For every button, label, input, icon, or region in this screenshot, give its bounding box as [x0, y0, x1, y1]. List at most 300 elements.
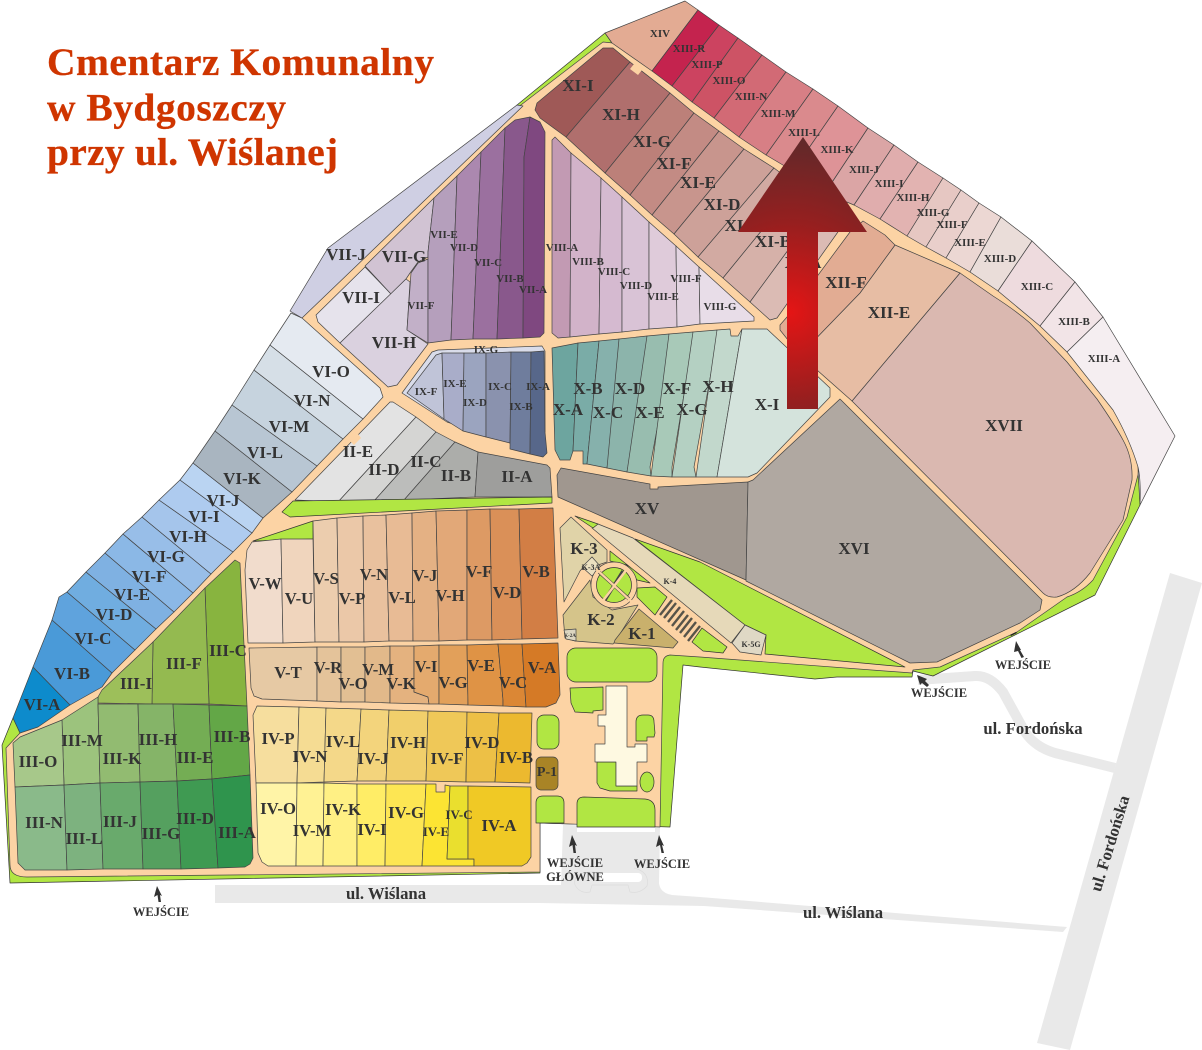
plot XI-F	[630, 113, 719, 215]
labels: section IV: IV-O	[260, 799, 296, 818]
labels: section XI: XI-E	[680, 173, 716, 192]
labels: section VIII: VIII-D	[620, 280, 652, 292]
section XVI: XVI	[838, 539, 870, 558]
plot X-C	[587, 339, 622, 468]
labels: section III: III-N	[25, 813, 64, 832]
plot VI-C	[52, 592, 135, 673]
plot VII-H	[340, 279, 428, 387]
plot X-E	[627, 334, 673, 476]
labels: section IX: IX-E	[443, 378, 467, 390]
labels: section IV: IV-N	[293, 747, 327, 766]
labels: K area: K-3	[570, 539, 598, 558]
plot P-1: P-1	[537, 765, 557, 780]
section IV	[253, 706, 533, 866]
plot IX-D	[463, 353, 486, 437]
labels: section XI: XI-A	[785, 253, 822, 272]
label: entrance east 2: WEJŚCIE	[911, 686, 967, 700]
labels: section V: V-E	[467, 656, 495, 675]
plot VI-O	[270, 313, 383, 419]
green lawn above P-1	[537, 715, 559, 749]
labels: section VIII: VIII-C	[598, 266, 630, 278]
roundabout	[591, 562, 637, 608]
labels: section III: III-C	[209, 641, 247, 660]
labels: section XIII	[673, 43, 1120, 365]
plot XIII-G	[907, 178, 961, 247]
labels: section III: III-J	[103, 812, 138, 831]
plot XIII-J	[825, 128, 894, 205]
labels: section V: V-C	[499, 673, 527, 692]
labels: section V: V-M	[362, 660, 394, 679]
labels: section IV: IV-E	[423, 824, 449, 839]
plot II-B	[404, 442, 478, 500]
plot V-K	[390, 646, 429, 704]
section X	[552, 329, 830, 477]
labels: section XIII: XIII-N	[735, 91, 767, 103]
label: entrance south-west: WEJŚCIE	[133, 905, 189, 919]
labels: section X: X-C	[593, 403, 623, 422]
labels: section X: X-D	[615, 379, 645, 398]
street label: ul. Wiślana left: ul. Wiślana	[346, 884, 427, 903]
plot VI-D	[67, 572, 156, 650]
labels: section XI: XI-G	[633, 132, 671, 151]
plot IV-N	[297, 707, 326, 783]
labels: section XI: XI-B	[755, 232, 791, 251]
arrow: main entrance	[569, 835, 577, 853]
labels: section VI: VI-J	[206, 491, 240, 510]
labels: K area: K-3A	[582, 563, 601, 572]
section XI	[535, 48, 845, 320]
plot VIII-G	[699, 267, 754, 324]
labels: section VII: VII-H	[372, 333, 416, 352]
labels: section V: V-A	[528, 658, 556, 677]
labels: section X: X-G	[676, 400, 708, 419]
plot X-A	[552, 343, 578, 460]
labels: section V: V-F	[466, 562, 492, 581]
labels: section IV: IV-F	[430, 749, 464, 768]
plot K-3A	[582, 557, 601, 576]
green lawn by entrance	[577, 797, 655, 827]
plot IX-A	[530, 351, 547, 457]
labels: section IV: IV-B	[499, 748, 533, 767]
plot VI-I	[159, 480, 252, 552]
labels: section XIII: XIII-O	[712, 75, 746, 87]
green lawn below P-1	[536, 796, 564, 823]
plot IV-M	[296, 783, 324, 866]
plot IV-K	[323, 783, 357, 866]
labels: section V: V-S	[313, 569, 339, 588]
section XV: XV	[635, 499, 660, 518]
labels: section VI	[24, 362, 350, 714]
plot XI-H	[566, 62, 670, 173]
green wedge	[610, 551, 650, 583]
plot XI-A	[750, 204, 845, 320]
labels: section X: X-B	[573, 379, 603, 398]
green top triangle	[575, 516, 598, 528]
title: przy ul. Wiślanej	[47, 130, 338, 174]
section XV	[557, 468, 748, 580]
labels: section V: V-R	[314, 658, 343, 677]
plot VI-K	[193, 431, 292, 518]
plot XII-E	[800, 245, 960, 401]
plot III-C	[205, 560, 247, 706]
plot V-M	[365, 646, 390, 703]
labels: section III	[19, 641, 257, 848]
labels: section VI: VI-F	[132, 567, 166, 586]
labels: section V	[248, 562, 556, 693]
plot K-3	[560, 517, 607, 602]
green lower	[692, 628, 727, 653]
labels: section XIII: XIII-A	[1088, 353, 1120, 365]
green lawn east of chapel	[636, 715, 655, 741]
labels: section XII: XII-E	[868, 303, 910, 322]
plot XIII-O	[692, 38, 762, 118]
labels: section VIII: VIII-F	[670, 273, 702, 285]
notch in II-E	[350, 434, 361, 445]
label: main entrance: WEJŚCIE	[547, 856, 603, 870]
plot III-O	[13, 720, 64, 787]
labels: section IX: IX-C	[488, 381, 512, 393]
plot XIII-B	[1040, 282, 1103, 352]
plot XIII-M	[739, 72, 813, 155]
labels: section VI: VI-M	[269, 417, 309, 436]
title: Cmentarz Komunalny	[47, 40, 434, 84]
plot V-F	[467, 509, 492, 640]
plot III-F	[152, 588, 209, 704]
labels: section III: III-M	[61, 731, 103, 750]
labels: section VII: VII-G	[382, 247, 426, 266]
plot IX-B	[510, 352, 531, 454]
plot III-H	[138, 704, 177, 782]
labels: section XIII: XIII-G	[916, 207, 950, 219]
plot K-5G	[732, 625, 766, 655]
plot VII-B	[497, 117, 530, 339]
labels: section II: II-E	[343, 442, 373, 461]
arrow: entrance east 2	[917, 675, 929, 687]
section III	[13, 560, 257, 870]
plot VII-D	[451, 152, 481, 340]
labels: section XII	[825, 273, 910, 322]
labels: section VIII: VIII-G	[703, 301, 737, 313]
plot X-G	[672, 330, 717, 477]
labels: section IV: IV-C	[445, 807, 473, 822]
labels: section XI: XI-I	[562, 76, 594, 95]
street label: ul. Fordońska: ul. Fordońska	[983, 719, 1083, 738]
plot IV-I	[357, 784, 386, 866]
plot VI-L	[215, 405, 317, 492]
labels: section II: II-D	[368, 460, 400, 479]
faint loop outline	[575, 868, 647, 892]
labels: section V: V-U	[285, 589, 313, 608]
section K area	[560, 516, 905, 667]
plot XIII-K	[793, 106, 868, 193]
labels: section VI: VI-G	[147, 547, 185, 566]
green triangle by V-W	[253, 521, 313, 541]
labels: section IV: IV-K	[325, 800, 361, 819]
plot VIII-E	[649, 222, 677, 329]
plot XI-G	[605, 93, 694, 195]
labels: section V: V-D	[493, 583, 521, 602]
labels: section V: V-T	[274, 663, 302, 682]
plot XI-D	[674, 149, 774, 257]
plot V-O	[341, 647, 365, 702]
labels: section III: III-A	[218, 823, 257, 842]
plot II-E	[295, 402, 416, 502]
green boundary	[2, 33, 1140, 883]
plot IV-J	[357, 709, 389, 781]
plot V-W	[245, 539, 283, 643]
plot IV-A	[468, 786, 531, 866]
plot X-I	[717, 329, 830, 477]
labels: K area: K-2A	[564, 634, 576, 639]
green lawn west of chapel	[570, 687, 603, 713]
plot III-A	[212, 775, 253, 868]
labels: section V: V-N	[360, 565, 388, 584]
section IX	[402, 344, 550, 457]
labels: section III: III-F	[166, 654, 202, 673]
stairs	[660, 600, 700, 641]
plot II-D	[338, 417, 436, 502]
arrow: entrance south	[656, 835, 664, 853]
plot XIII-E	[946, 203, 1001, 272]
plot IX-C	[486, 352, 511, 443]
labels: section IV: IV-J	[357, 749, 389, 768]
labels: section II: II-C	[410, 452, 442, 471]
plot K-4	[592, 524, 745, 643]
plot XI-C	[698, 168, 798, 278]
labels: section VIII	[546, 242, 737, 313]
street label: ul. Fordońska vertical: ul. Fordońska	[1086, 793, 1134, 894]
plot XI-B	[723, 186, 822, 302]
labels: section XI: XI-C	[725, 216, 761, 235]
plot II-C	[374, 432, 455, 501]
notch in XI-H	[630, 64, 642, 75]
plot IV-C	[447, 786, 468, 859]
labels: section IV: IV-M	[293, 821, 332, 840]
plot II-A	[475, 452, 552, 497]
label: entrance east: WEJŚCIE	[995, 658, 1051, 672]
labels: section VI: VI-N	[294, 391, 331, 410]
plot IV-F	[426, 711, 467, 782]
plot VI-B	[33, 620, 112, 705]
plot V-H	[436, 510, 467, 641]
labels: section XIII: XIII-E	[954, 237, 986, 249]
plot K-2A	[564, 629, 576, 641]
labels: section V: V-O	[338, 674, 368, 693]
labels: section IV: IV-H	[390, 733, 426, 752]
plot V-S	[313, 518, 339, 642]
section VII	[316, 117, 547, 387]
labels: section V: V-L	[388, 588, 416, 607]
labels: section II: II-B	[441, 466, 471, 485]
plot V-B	[519, 508, 558, 639]
plot III-E	[173, 704, 212, 781]
plot X-B	[573, 341, 599, 464]
plot VI-H	[142, 500, 233, 574]
labels: section XIII: XIII-J	[849, 164, 879, 176]
labels: section V: V-P	[339, 589, 365, 608]
plot X-H	[696, 329, 742, 477]
labels: section X	[553, 377, 780, 422]
labels: section X: X-A	[553, 400, 584, 419]
label: main entrance	[546, 856, 604, 884]
labels: section XIII: XIII-D	[984, 253, 1016, 265]
plot P-1	[536, 757, 558, 790]
plot V-I	[414, 645, 439, 704]
plot VIII-F	[676, 246, 700, 327]
plot III-B	[209, 705, 250, 779]
plot IV-B	[495, 713, 532, 783]
labels: section V: V-H	[435, 586, 465, 605]
labels: section VII: VII-I	[342, 288, 380, 307]
labels: section XIII: XIII-I	[875, 178, 903, 190]
labels: section V: V-B	[522, 562, 550, 581]
labels: section III: III-H	[139, 730, 177, 749]
label: main entrance: GŁÓWNE	[546, 870, 604, 884]
section XVII: XVII	[985, 416, 1023, 435]
plot V-J	[412, 511, 439, 641]
section V	[245, 508, 560, 707]
plot XIII-F	[926, 190, 979, 258]
plot VI-E	[86, 553, 174, 629]
labels: section VI: VI-C	[75, 629, 111, 648]
labels: section VIII: VIII-E	[647, 291, 679, 303]
plot III-K	[98, 704, 140, 783]
labels: section VII: VII-J	[326, 245, 366, 264]
labels: section III: III-I	[120, 674, 152, 693]
title	[47, 40, 434, 174]
labels: section IV: IV-A	[482, 816, 516, 835]
plot XIII-L	[766, 89, 838, 171]
labels: section XIII: XIII-B	[1058, 316, 1091, 328]
labels: section VIII: VIII-A	[546, 242, 578, 254]
section XVII	[852, 273, 1132, 597]
labels: section IX	[415, 344, 550, 413]
plot IX-G band	[402, 346, 545, 443]
arrow: entrance south-west	[154, 886, 162, 902]
plot III-M	[62, 697, 100, 785]
labels: section X: X-E	[635, 403, 665, 422]
gate mark	[1010, 632, 1017, 636]
labels: K area	[564, 539, 761, 649]
section XVI	[746, 399, 1042, 663]
labels: section III: III-K	[103, 749, 142, 768]
plot VII-G	[365, 198, 434, 294]
plot IX-E	[442, 353, 464, 431]
labels: section VI: VI-E	[114, 585, 150, 604]
white loop at main entrance	[600, 873, 642, 882]
labels: section XIII: XIII-R	[673, 43, 706, 55]
labels: section VI: VI-D	[96, 605, 132, 624]
section VII-J	[290, 105, 523, 318]
plot V-T	[249, 647, 317, 701]
plot K-2	[563, 580, 638, 644]
street label: ul. Wiślana right: ul. Wiślana	[803, 903, 884, 922]
labels: section X: X-F	[663, 379, 691, 398]
labels: section III: III-G	[142, 824, 180, 843]
plot V-L	[386, 513, 413, 641]
labels: section IV: IV-L	[326, 732, 360, 751]
plot VIII-C	[599, 178, 622, 334]
plot XIII-H	[880, 162, 943, 236]
plot V-P	[337, 516, 364, 642]
plot III-L	[64, 783, 103, 870]
labels: section IV	[260, 729, 533, 840]
plot IV-O	[256, 783, 297, 866]
labels: section VI: VI-O	[312, 362, 350, 381]
green field east of K-4	[635, 539, 905, 667]
labels: section XII: XII-F	[825, 273, 867, 292]
section XIV	[605, 1, 698, 71]
plot VI-N	[254, 345, 363, 439]
plot X-F	[651, 332, 693, 477]
labels: section V: V-W	[248, 574, 282, 593]
labels: section IX: IX-B	[509, 401, 533, 413]
labels: section II: II-A	[501, 467, 533, 486]
labels: section III: III-E	[177, 748, 213, 767]
green lawn below chapel	[597, 762, 637, 791]
street: ul. Fordońska branch	[918, 676, 1115, 768]
green strip under II	[282, 497, 552, 517]
labels: section III: III-D	[176, 809, 214, 828]
plot V-R	[317, 647, 341, 702]
green small oval	[640, 772, 654, 792]
plot IV-D	[466, 712, 499, 782]
labels: section XI: XI-F	[657, 154, 691, 173]
plot XIII-I	[854, 145, 918, 219]
labels: section IX: IX-A	[526, 381, 550, 393]
labels: section X: X-H	[702, 377, 734, 396]
plot XI-I	[535, 48, 630, 137]
green lawn at main alley	[567, 648, 657, 682]
labels: K area: K-1	[628, 624, 656, 643]
section XII	[780, 221, 960, 401]
green middle	[637, 587, 667, 615]
title: w Bydgoszczy	[47, 86, 286, 130]
plot VI-A	[13, 667, 70, 733]
labels: section VII	[326, 229, 547, 352]
plot VIII-D	[622, 197, 649, 332]
section II	[295, 402, 552, 502]
plot IV-P	[253, 706, 299, 783]
plot XI-E	[652, 131, 744, 234]
labels: section V: V-I	[415, 657, 437, 676]
plot XIII-A	[1067, 317, 1175, 505]
plot V-C	[498, 644, 526, 707]
labels: section XIII: XIII-M	[761, 108, 796, 120]
plot V-U	[281, 539, 315, 643]
labels: section XIII: XIII-F	[936, 219, 968, 231]
plot VIII-A	[552, 137, 571, 338]
labels: section XIII: XIII-K	[820, 144, 854, 156]
labels: section XIII: XIII-P	[691, 59, 723, 71]
labels: section VI: VI-L	[247, 443, 283, 462]
plot XIII-P	[672, 25, 738, 102]
section XIV: XIV	[650, 28, 670, 40]
plot XIII-D	[970, 217, 1032, 291]
labels: section VII: VII-F	[408, 300, 435, 312]
plot VI-F	[105, 534, 193, 612]
plot VII-F	[407, 259, 428, 343]
labels: section XI	[562, 76, 822, 272]
labels: section II	[343, 442, 533, 486]
plot III-N	[15, 785, 67, 870]
plot VII-C	[473, 128, 505, 339]
plot IV-G	[385, 784, 426, 866]
plot III-J	[100, 782, 143, 869]
plot XIII-N	[714, 55, 786, 137]
plot III-I	[98, 642, 153, 704]
plot III-G	[140, 781, 181, 869]
